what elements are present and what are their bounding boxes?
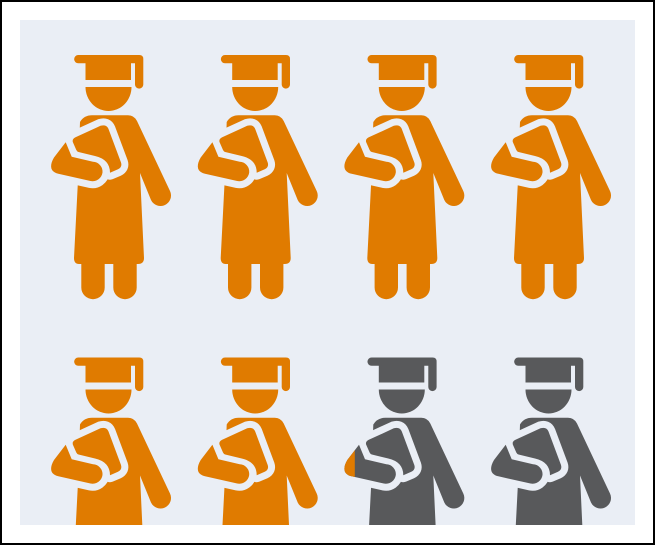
icon: graduate 7 grey with orange arm tip xyxy=(344,358,464,525)
icon: graduate 4 orange xyxy=(491,55,611,299)
icon: graduate 5 orange xyxy=(51,358,171,525)
icon: graduate 6 orange xyxy=(198,358,318,525)
icon: graduate 1 orange xyxy=(51,55,171,299)
icon: graduate 3 orange xyxy=(344,55,464,299)
icon: graduate 2 orange xyxy=(198,55,318,299)
icon: graduate 8 grey xyxy=(491,358,611,525)
